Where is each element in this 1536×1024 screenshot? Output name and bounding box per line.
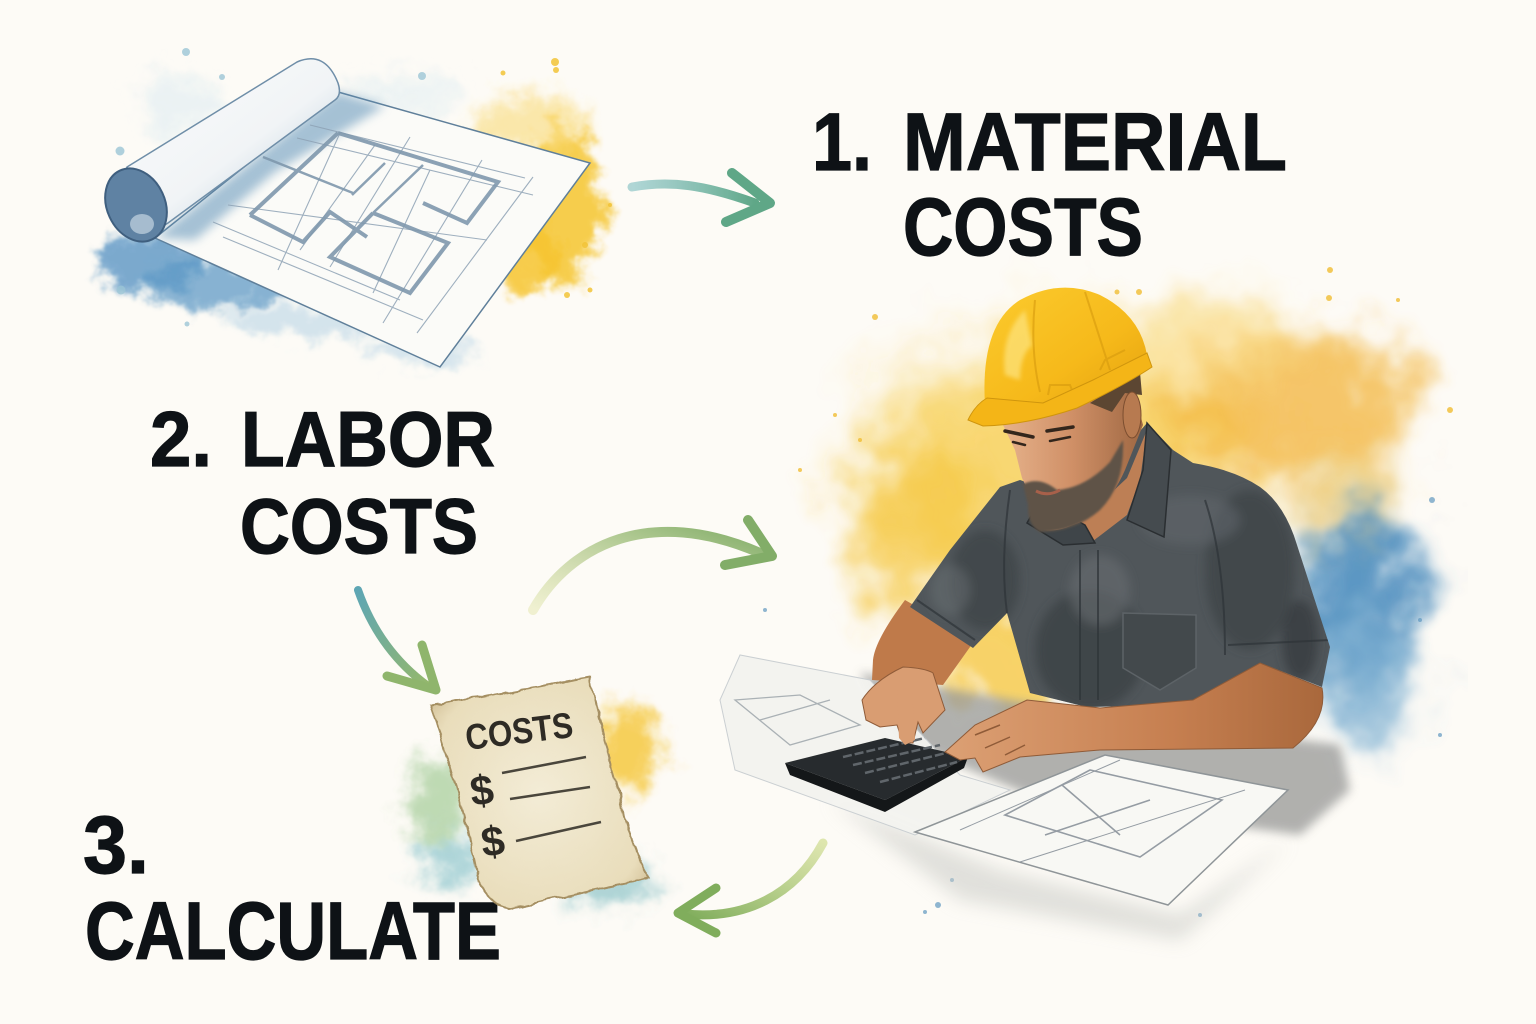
- shadow under the roll: [155, 92, 385, 240]
- watercolor wash behind sheet: [410, 708, 660, 907]
- hair: [1090, 372, 1142, 412]
- arrow: cost sheet to worker: [533, 520, 772, 610]
- left sheet lines: [735, 695, 900, 800]
- heading: 1. material costs: [812, 97, 1287, 273]
- heading: 2. labor costs: [150, 395, 495, 570]
- blueprint sheet right: [915, 755, 1288, 905]
- illustration: blueprint roll: [94, 48, 612, 367]
- floor plan grid lines: [213, 125, 533, 333]
- heading: 1. material costs: MATERIAL: [903, 97, 1287, 188]
- illustration: worker at desk: [720, 267, 1453, 940]
- calculator: [785, 738, 968, 812]
- shirt: [900, 420, 1340, 720]
- dollar signs: $: [467, 765, 496, 815]
- arrow: worker to cost sheet: [678, 843, 823, 933]
- aged paper: [430, 677, 650, 908]
- head: [1003, 385, 1143, 531]
- blueprint sheet left: [720, 655, 1010, 835]
- left hand pressing calculator: [862, 667, 945, 743]
- illustration: cost sheet: [410, 677, 660, 908]
- collar: [1027, 423, 1171, 545]
- right hand knuckles: [975, 725, 1025, 755]
- sheet title: COSTS: [463, 704, 575, 758]
- neck: [1080, 430, 1147, 541]
- dollar signs: [467, 765, 507, 866]
- mouth: [1036, 490, 1060, 494]
- roll end: [94, 158, 178, 252]
- dollar signs: $: [478, 816, 507, 866]
- arrow: labor costs to cost sheet: [358, 590, 436, 690]
- left hand index finger: [897, 688, 915, 745]
- heading: 3. calculate: [83, 800, 501, 977]
- sheet rows: [502, 757, 601, 841]
- heading: 1. material costs: 1.: [812, 97, 872, 188]
- paper roll: [110, 59, 339, 232]
- floor plan walls: [250, 133, 498, 293]
- heading: 2. labor costs: 2.: [150, 395, 212, 483]
- heading: 3. calculate: CALCULATE: [85, 886, 501, 977]
- heading: 2. labor costs: COSTS: [240, 482, 478, 570]
- heading: 1. material costs: COSTS: [903, 182, 1143, 273]
- arrow: blueprint to material costs: [632, 173, 770, 222]
- beard: [1023, 440, 1123, 532]
- right arm and hand: [945, 663, 1323, 772]
- ear: [1123, 392, 1141, 438]
- shirt pocket: [1123, 613, 1196, 690]
- left forearm: [872, 600, 975, 685]
- eyes and brows: [1005, 427, 1073, 445]
- watercolor wash behind worker: [763, 267, 1453, 917]
- desk surface: [830, 673, 1350, 940]
- heading: 3. calculate: 3.: [83, 800, 149, 891]
- hard hat: [968, 288, 1152, 426]
- blueprint sheet: [155, 92, 590, 367]
- watercolor wash behind blueprint: [95, 48, 612, 366]
- heading: 2. labor costs: LABOR: [241, 395, 495, 483]
